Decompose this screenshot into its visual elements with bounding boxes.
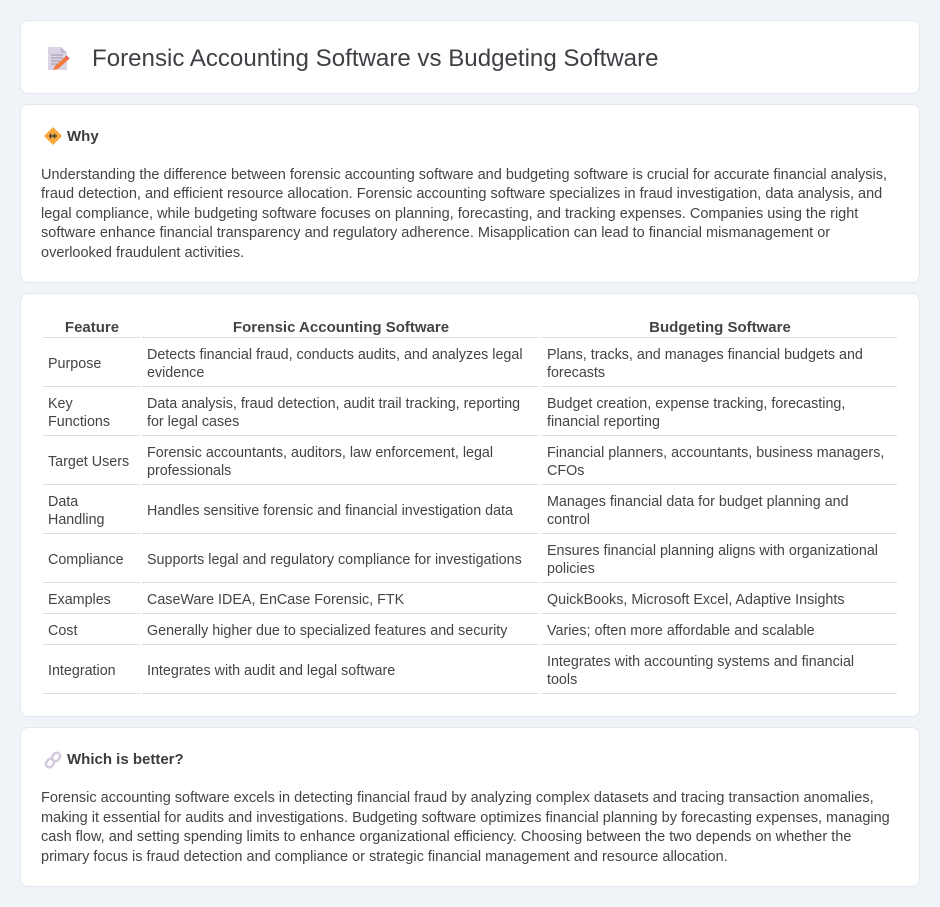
panel: which is better [20,727,920,887]
text block: why explanation: Understanding the difference between forensic accounting software and budgeting software is crucial for accurate financial analysis, [41,167,887,183]
text block: why explanation: legal compliance, while budgeting software focuses on planning, forecasting, and tracking expenses. Companies using the right [41,206,858,222]
heading: why: Why [67,128,99,145]
text block: why explanation: software enhance financial transparency and regulatory adherence. Misapplication can lead to financial mismanagement or [41,225,830,241]
table header row: Budgeting Software [649,319,791,336]
row: compliance: Compliance [48,552,124,568]
table header row [65,319,791,336]
row: target users: Financial planners, accountants, business managers, [547,445,884,461]
row: compliance: policies [547,561,595,577]
row: integration [48,654,854,688]
text block: verdict: primary focus is fraud detection and compliance or strategic financial management and resource allocation. [41,849,728,865]
text block: verdict [41,790,890,865]
row: key functions [48,396,845,430]
row: data handling: Handling [48,512,104,528]
row: examples: CaseWare IDEA, EnCase Forensic, FTK [147,592,404,608]
row: integration: Integrates with accounting systems and financial [547,654,854,670]
title: Forensic Accounting Software vs Budgeting Software [92,45,659,72]
row: integration: tools [547,672,577,688]
row: cost: Generally higher due to specialized features and security [147,623,507,639]
row: data handling: Data [48,494,78,510]
text block: why explanation: overlooked fraudulent activities. [41,245,244,261]
row: integration: Integrates with audit and legal software [147,663,395,679]
row: examples: Examples [48,592,111,608]
row: examples: QuickBooks, Microsoft Excel, Adaptive Insights [547,592,845,608]
row: data handling: control [547,512,590,528]
panel: why [20,104,920,283]
text block: verdict: making it essential for audits and investigations. Budgeting software optimizes financial planning by forecasting expenses, managing [41,810,890,826]
text block: verdict: Forensic accounting software excels in detecting financial fraud by analyzing complex datasets and tracing transaction anomalies, [41,790,874,806]
row: cost: Cost [48,623,77,639]
table header row: Feature [65,319,119,336]
icon: memo with pencil [48,47,70,70]
text block: verdict: cash flow, and setting spending limits to enhance organizational efficiency. Choosing between the two depends on whether the [41,829,851,845]
row: target users: CFOs [547,463,584,479]
text block: why explanation: fraud detection, and efficient resource allocation. Forensic accounting software specializes in fraud investigation, data analysis, and [41,186,882,202]
row: compliance: Ensures financial planning aligns with organizational [547,543,878,559]
row: purpose: Purpose [48,356,101,372]
row: integration: Integration [48,663,116,679]
row: purpose: forecasts [547,365,605,381]
row: data handling [48,494,849,528]
row: target users [48,445,884,479]
row: purpose: Detects financial fraud, conducts audits, and analyzes legal [147,347,523,363]
row: key functions: Key [48,396,73,412]
row: target users: professionals [147,463,231,479]
text block: why explanation [41,167,887,261]
row: key functions: for legal cases [147,414,239,430]
row: target users: Target Users [48,454,129,470]
row: purpose: Plans, tracks, and manages financial budgets and [547,347,863,363]
row: key functions: financial reporting [547,414,660,430]
row: target users: Forensic accountants, auditors, law enforcement, legal [147,445,493,461]
panel: title header [20,20,920,94]
panel: comparison table [20,293,920,717]
row: compliance: Supports legal and regulatory compliance for investigations [147,552,522,568]
row: purpose: evidence [147,365,204,381]
heading: which is better: Which is better? [67,751,184,768]
row: data handling: Manages financial data for budget planning and [547,494,849,510]
row: key functions: Data analysis, fraud detection, audit trail tracking, reporting [147,396,520,412]
row: cost [48,623,815,639]
row: examples [48,592,845,608]
table header row: Forensic Accounting Software [233,319,449,336]
row: purpose [48,347,863,381]
row: key functions: Budget creation, expense tracking, forecasting, [547,396,845,412]
row: data handling: Handles sensitive forensic and financial investigation data [147,503,513,519]
row: cost: Varies; often more affordable and scalable [547,623,815,639]
row: compliance [48,543,878,577]
row: key functions: Functions [48,414,110,430]
icon: diamond sign [44,127,62,145]
icon: link [44,752,62,768]
